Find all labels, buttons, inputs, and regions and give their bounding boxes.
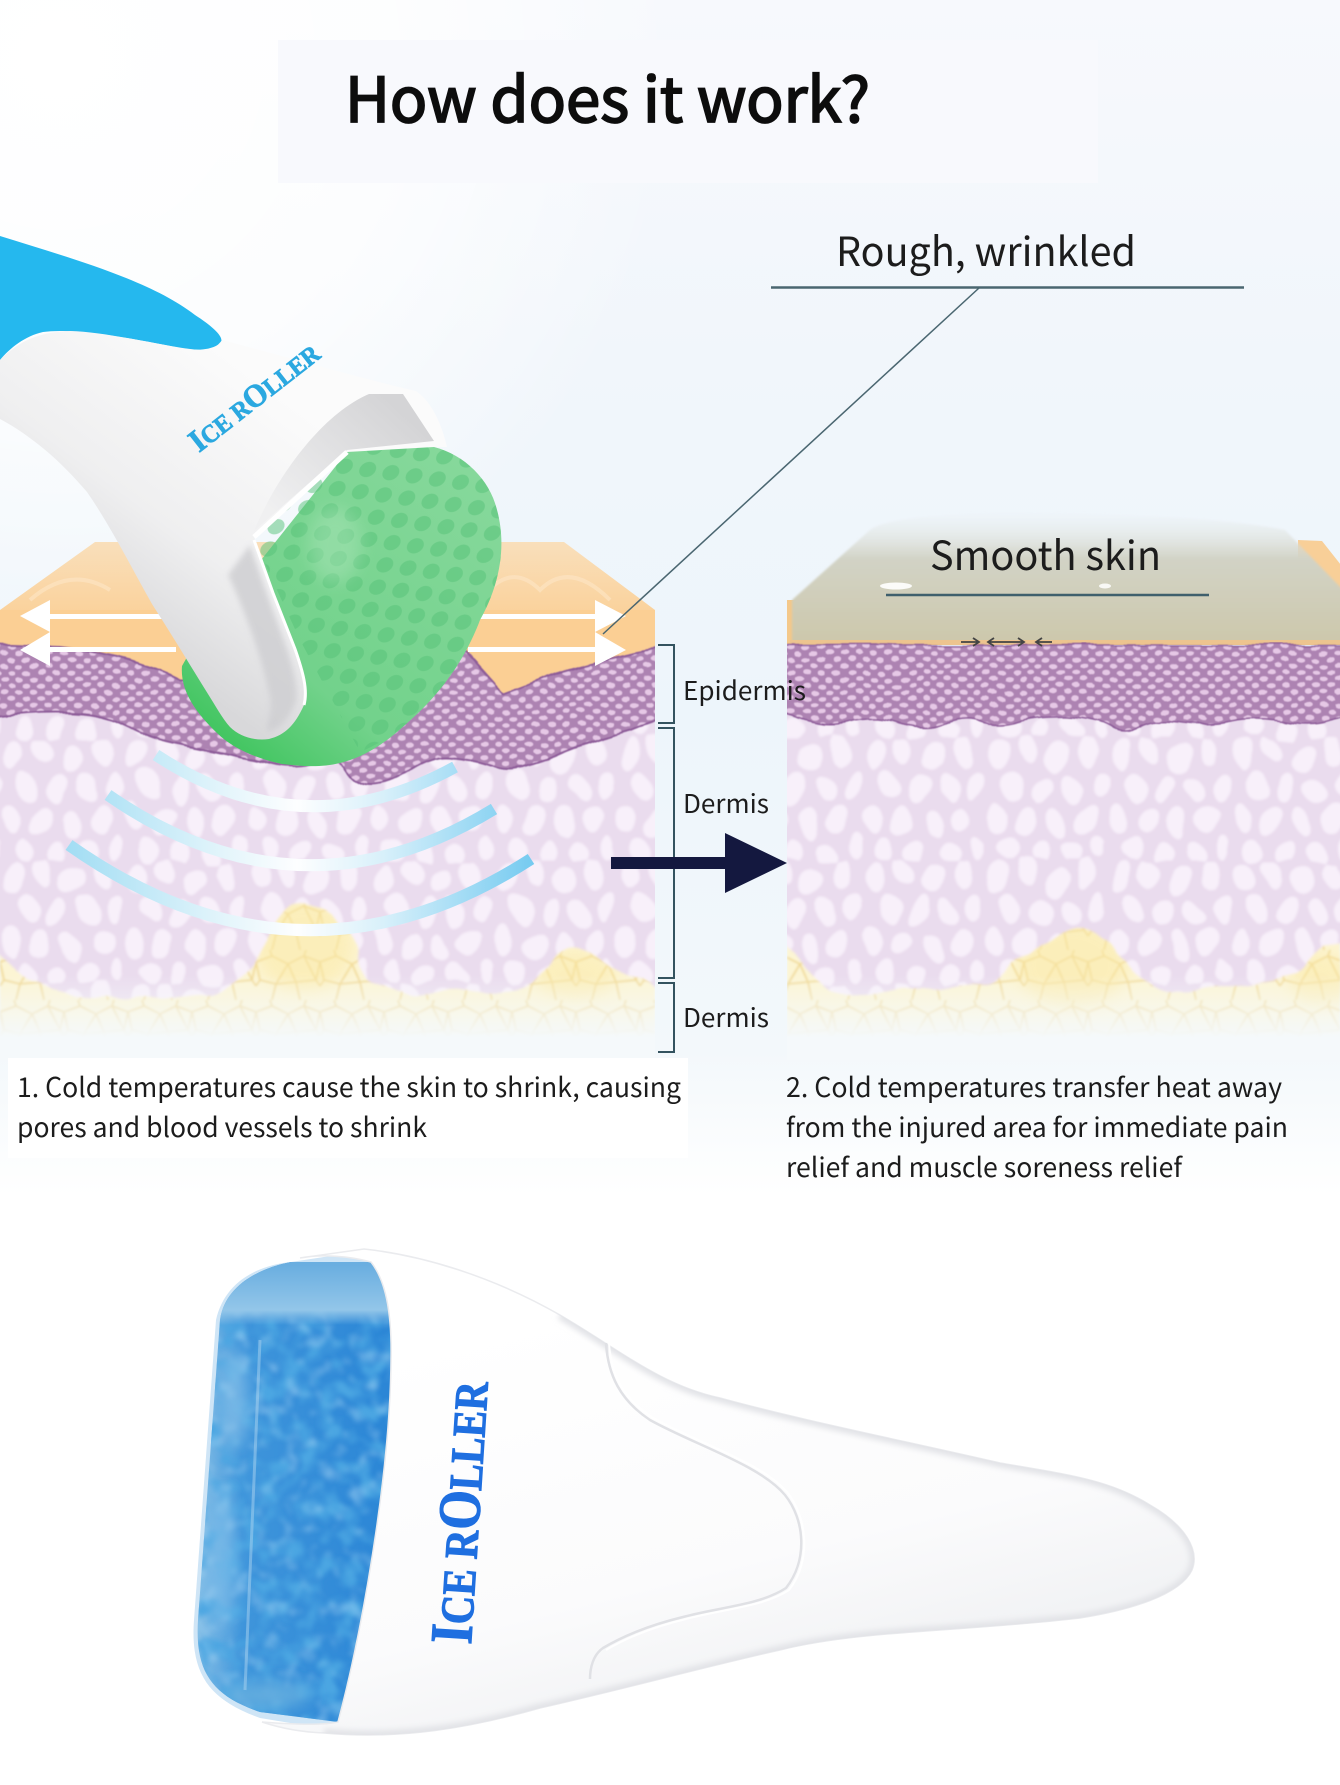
callout: rough, wrinkled	[603, 220, 1244, 634]
white handle	[0, 331, 447, 740]
caption 2: from the injured area for immediate pain	[786, 1106, 1288, 1145]
label: smooth skin: Smooth skin	[930, 524, 1161, 582]
caption 2: relief and muscle soreness relief	[786, 1146, 1183, 1185]
fork interior	[254, 394, 434, 531]
product logo: ICE ROLLER	[418, 1378, 501, 1646]
epidermis layer	[780, 645, 1340, 732]
icon: blue ice roller product	[190, 1249, 1194, 1735]
fat layer	[0, 902, 655, 1032]
panel: rough wrinkled skin	[0, 542, 665, 1060]
gel rim glow	[194, 1250, 400, 1732]
layer label: lower dermis: Dermis	[683, 998, 769, 1035]
surface glare	[880, 582, 912, 590]
tension arrows	[961, 638, 1052, 646]
subcutaneous fade	[0, 975, 655, 1060]
handle logo: ICE ROLLER	[181, 334, 327, 459]
blue grip	[0, 236, 221, 360]
white body	[262, 1249, 1194, 1735]
layer label: dermis: Dermis	[683, 784, 769, 821]
panel: smooth skin	[777, 513, 1340, 1060]
cold waves	[69, 755, 531, 930]
beige cooled surface	[791, 525, 1340, 640]
body crease	[590, 1343, 801, 1679]
arrow: before to after	[611, 833, 787, 893]
layer label: epidermis: Epidermis	[683, 671, 806, 708]
dermis layer	[777, 700, 1340, 996]
body edge shading	[324, 1315, 1194, 1735]
title block: How does it work?	[345, 50, 870, 140]
green gel roller	[182, 445, 501, 766]
icon: ice roller on skin	[0, 236, 501, 766]
subcutaneous fade	[787, 975, 1340, 1060]
caption 1: pores and blood vessels to shrink	[17, 1106, 427, 1145]
caption 2: 2. Cold temperatures transfer heat away	[786, 1066, 1282, 1105]
white stretch arrows	[20, 600, 626, 666]
layer brackets	[658, 645, 674, 1052]
orange skin surface	[0, 542, 655, 610]
epidermis layer	[0, 645, 660, 785]
title block	[278, 40, 1098, 183]
fat layer	[787, 926, 1340, 1032]
caption 2	[786, 1066, 1288, 1185]
orange corner	[1298, 540, 1340, 588]
caption 1	[8, 1058, 688, 1158]
caption 1: 1. Cold temperatures cause the skin to shrink, causing	[17, 1066, 681, 1105]
blue gel cylinder	[198, 1262, 390, 1722]
dermis layer	[0, 700, 665, 999]
callout: rough, wrinkled: Rough, wrinkled	[836, 220, 1136, 278]
